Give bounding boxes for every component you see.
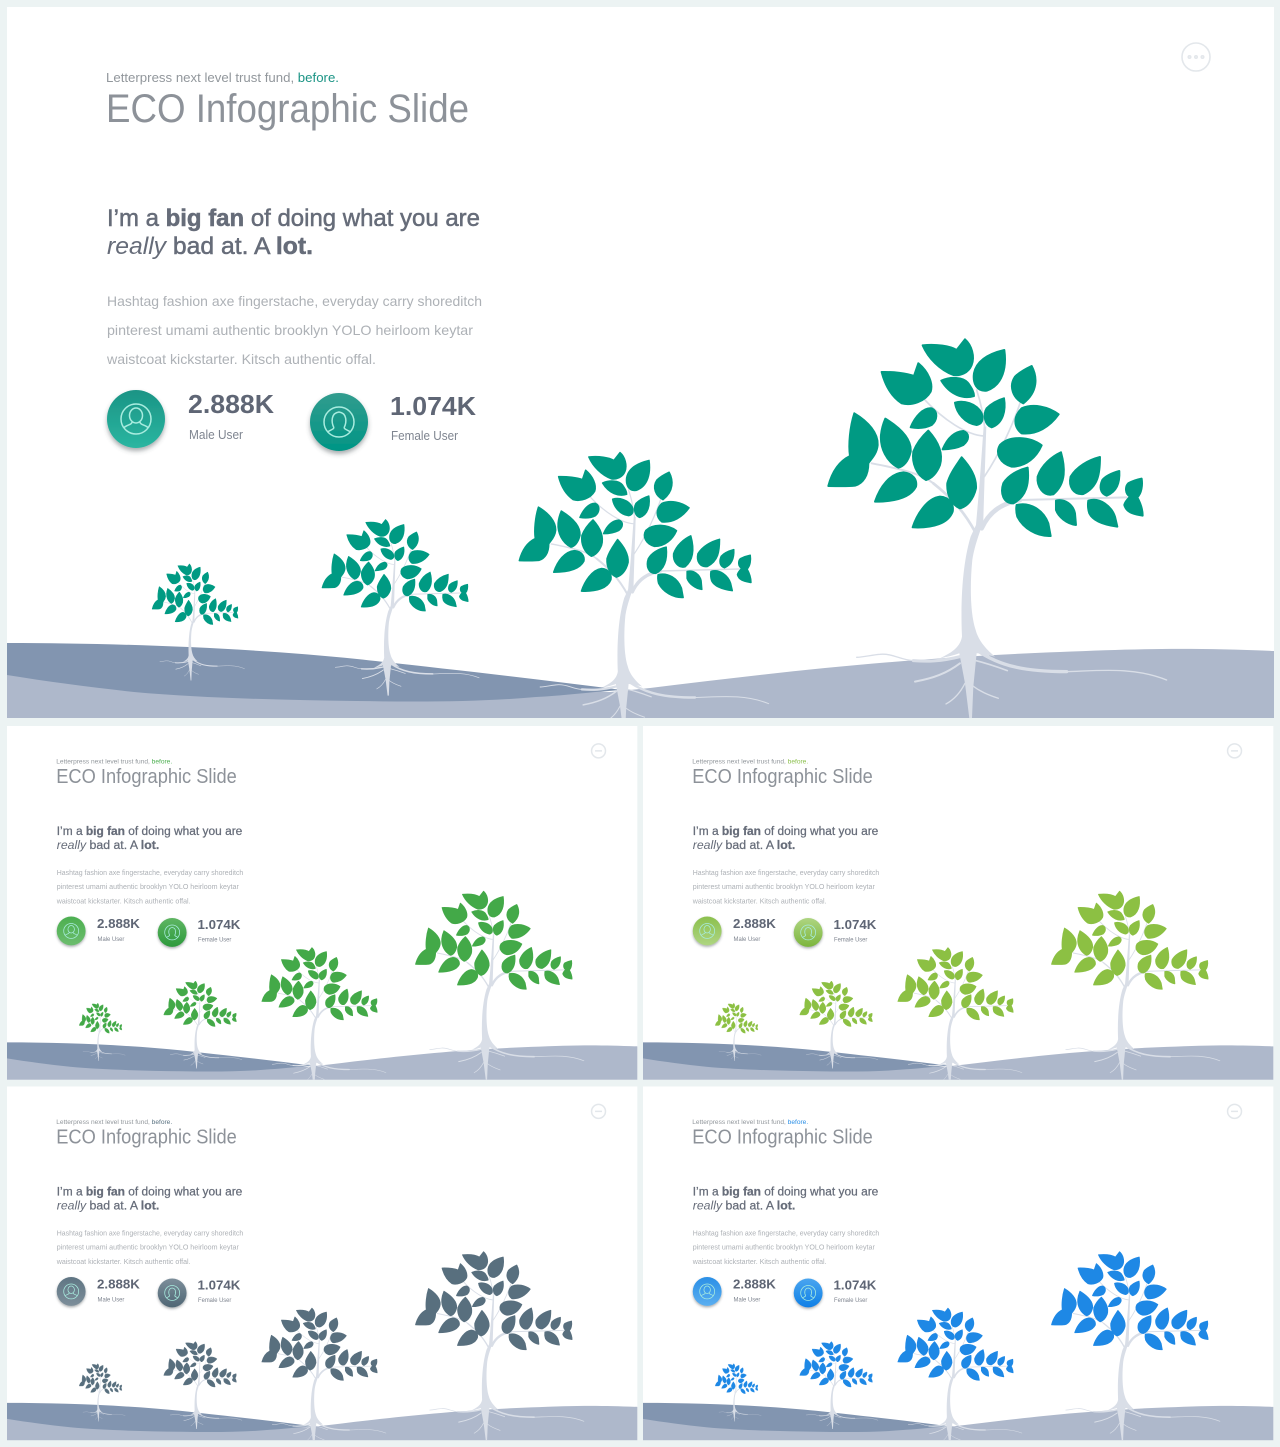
heading line 2: really bad at. A lot. bbox=[57, 1198, 159, 1212]
stat: female users: Female User bbox=[391, 429, 458, 443]
stat: female users: Female User bbox=[834, 936, 867, 943]
icon: male user bbox=[693, 917, 722, 945]
heading line 1: I’m a big fan of doing what you are bbox=[693, 1184, 879, 1198]
stat: male users bbox=[733, 916, 777, 943]
panel: green slide bbox=[7, 726, 637, 1087]
icon: menu dots bbox=[1228, 1104, 1241, 1118]
ground bbox=[7, 643, 1274, 718]
subtitle: Letterpress next level trust fund, before. bbox=[56, 1119, 172, 1126]
title: ECO Infographic Slide bbox=[56, 1127, 237, 1149]
title: ECO Infographic Slide bbox=[692, 766, 873, 788]
stat: female users: Female User bbox=[834, 1297, 867, 1304]
panel: lime slide bbox=[643, 726, 1273, 1087]
title: ECO Infographic Slide bbox=[692, 1127, 873, 1149]
body text: Hashtag fashion axe fingerstache, everyday carry shoreditch bbox=[57, 870, 243, 877]
trees bbox=[79, 891, 584, 1087]
icon: male user bbox=[693, 1277, 722, 1306]
stat: male users: Male User bbox=[734, 1296, 760, 1303]
stat: female users bbox=[834, 917, 877, 943]
stat: female users: Female User bbox=[198, 936, 231, 943]
stat: female users: 1.074K bbox=[390, 391, 476, 421]
subtitle: Letterpress next level trust fund, before. bbox=[106, 70, 339, 85]
body text: pinterest umami authentic brooklyn YOLO heirloom keytar bbox=[107, 322, 473, 338]
body text bbox=[56, 870, 243, 906]
trees bbox=[715, 1252, 1220, 1447]
heading line 2: really bad at. A lot. bbox=[57, 838, 159, 852]
body text: waistcoat kickstarter. Kitsch authentic offal. bbox=[56, 1259, 191, 1266]
trees bbox=[79, 1252, 584, 1447]
body text: waistcoat kickstarter. Kitsch authentic offal. bbox=[692, 899, 827, 906]
panel: slate slide bbox=[7, 1086, 637, 1447]
panel: blue slide bbox=[643, 1086, 1273, 1447]
body text: waistcoat kickstarter. Kitsch authentic offal. bbox=[56, 899, 191, 906]
icon: female user bbox=[158, 1279, 187, 1307]
stat: male users bbox=[97, 1276, 141, 1303]
stat: male users: 2.888K bbox=[733, 1276, 777, 1291]
stat: male users: Male User bbox=[734, 936, 760, 943]
stat: male users: 2.888K bbox=[188, 389, 274, 419]
stat: male users: Male User bbox=[189, 428, 243, 442]
title: ECO Infographic Slide bbox=[106, 87, 469, 131]
icon: menu dots bbox=[1228, 744, 1241, 758]
ground bbox=[7, 1042, 637, 1080]
stat: female users bbox=[198, 1277, 241, 1304]
body text: Hashtag fashion axe fingerstache, everyday carry shoreditch bbox=[693, 870, 879, 877]
body text: Hashtag fashion axe fingerstache, everyday carry shoreditch bbox=[107, 293, 482, 309]
trees bbox=[152, 339, 1167, 732]
stat: female users: Female User bbox=[198, 1297, 231, 1304]
icon: female user bbox=[794, 1279, 823, 1307]
title: ECO Infographic Slide bbox=[56, 766, 237, 788]
stat: female users bbox=[198, 917, 241, 943]
stat: male users: 2.888K bbox=[97, 1276, 141, 1291]
icon: female user bbox=[310, 393, 368, 451]
trees bbox=[715, 891, 1220, 1087]
body text bbox=[56, 1230, 243, 1266]
stat: male users: 2.888K bbox=[97, 916, 141, 931]
icon: male user bbox=[57, 1277, 86, 1306]
stat: female users: 1.074K bbox=[198, 1277, 241, 1292]
heading line 2: really bad at. A lot. bbox=[693, 838, 795, 852]
icon: male user bbox=[107, 390, 165, 448]
icon: female user bbox=[794, 918, 823, 947]
icon: menu dots bbox=[592, 1104, 605, 1118]
subtitle: Letterpress next level trust fund, before. bbox=[56, 758, 172, 765]
stat: female users: 1.074K bbox=[198, 917, 241, 932]
body text: Hashtag fashion axe fingerstache, everyday carry shoreditch bbox=[57, 1230, 243, 1237]
ground bbox=[7, 1403, 637, 1440]
body text: pinterest umami authentic brooklyn YOLO heirloom keytar bbox=[693, 884, 876, 891]
body text bbox=[692, 1230, 879, 1266]
icon: menu dots bbox=[592, 744, 605, 758]
body text bbox=[106, 293, 482, 367]
subtitle: Letterpress next level trust fund, before. bbox=[692, 758, 808, 765]
stat: male users bbox=[188, 389, 274, 442]
ground bbox=[643, 1403, 1273, 1440]
stat: female users: 1.074K bbox=[834, 1277, 877, 1292]
heading line 2: really bad at. A lot. bbox=[693, 1198, 795, 1212]
panel: large teal slide bbox=[7, 7, 1274, 732]
stat: female users bbox=[834, 1277, 877, 1304]
stat: female users: 1.074K bbox=[834, 917, 877, 932]
icon: male user bbox=[57, 917, 86, 945]
stat: male users: Male User bbox=[98, 936, 124, 943]
stat: female users bbox=[390, 391, 476, 443]
body text bbox=[692, 870, 879, 906]
heading line 1: I’m a big fan of doing what you are bbox=[693, 824, 879, 838]
body text: Hashtag fashion axe fingerstache, everyday carry shoreditch bbox=[693, 1230, 879, 1237]
heading line 1: I’m a big fan of doing what you are bbox=[57, 1184, 243, 1198]
body text: pinterest umami authentic brooklyn YOLO heirloom keytar bbox=[57, 884, 240, 891]
heading line 2: really bad at. A lot. bbox=[107, 233, 313, 260]
ground bbox=[643, 1042, 1273, 1080]
stat: male users bbox=[733, 1276, 777, 1303]
heading line 1: I’m a big fan of doing what you are bbox=[57, 824, 243, 838]
subtitle: Letterpress next level trust fund, before. bbox=[692, 1119, 808, 1126]
body text: pinterest umami authentic brooklyn YOLO heirloom keytar bbox=[693, 1245, 876, 1252]
body text: waistcoat kickstarter. Kitsch authentic offal. bbox=[106, 351, 376, 367]
icon: female user bbox=[158, 918, 187, 947]
stat: male users: 2.888K bbox=[733, 916, 777, 931]
icon: menu dots bbox=[1182, 43, 1210, 71]
heading line 1: I’m a big fan of doing what you are bbox=[107, 205, 480, 232]
stat: male users: Male User bbox=[98, 1296, 124, 1303]
body text: pinterest umami authentic brooklyn YOLO heirloom keytar bbox=[57, 1245, 240, 1252]
stat: male users bbox=[97, 916, 141, 943]
body text: waistcoat kickstarter. Kitsch authentic offal. bbox=[692, 1259, 827, 1266]
